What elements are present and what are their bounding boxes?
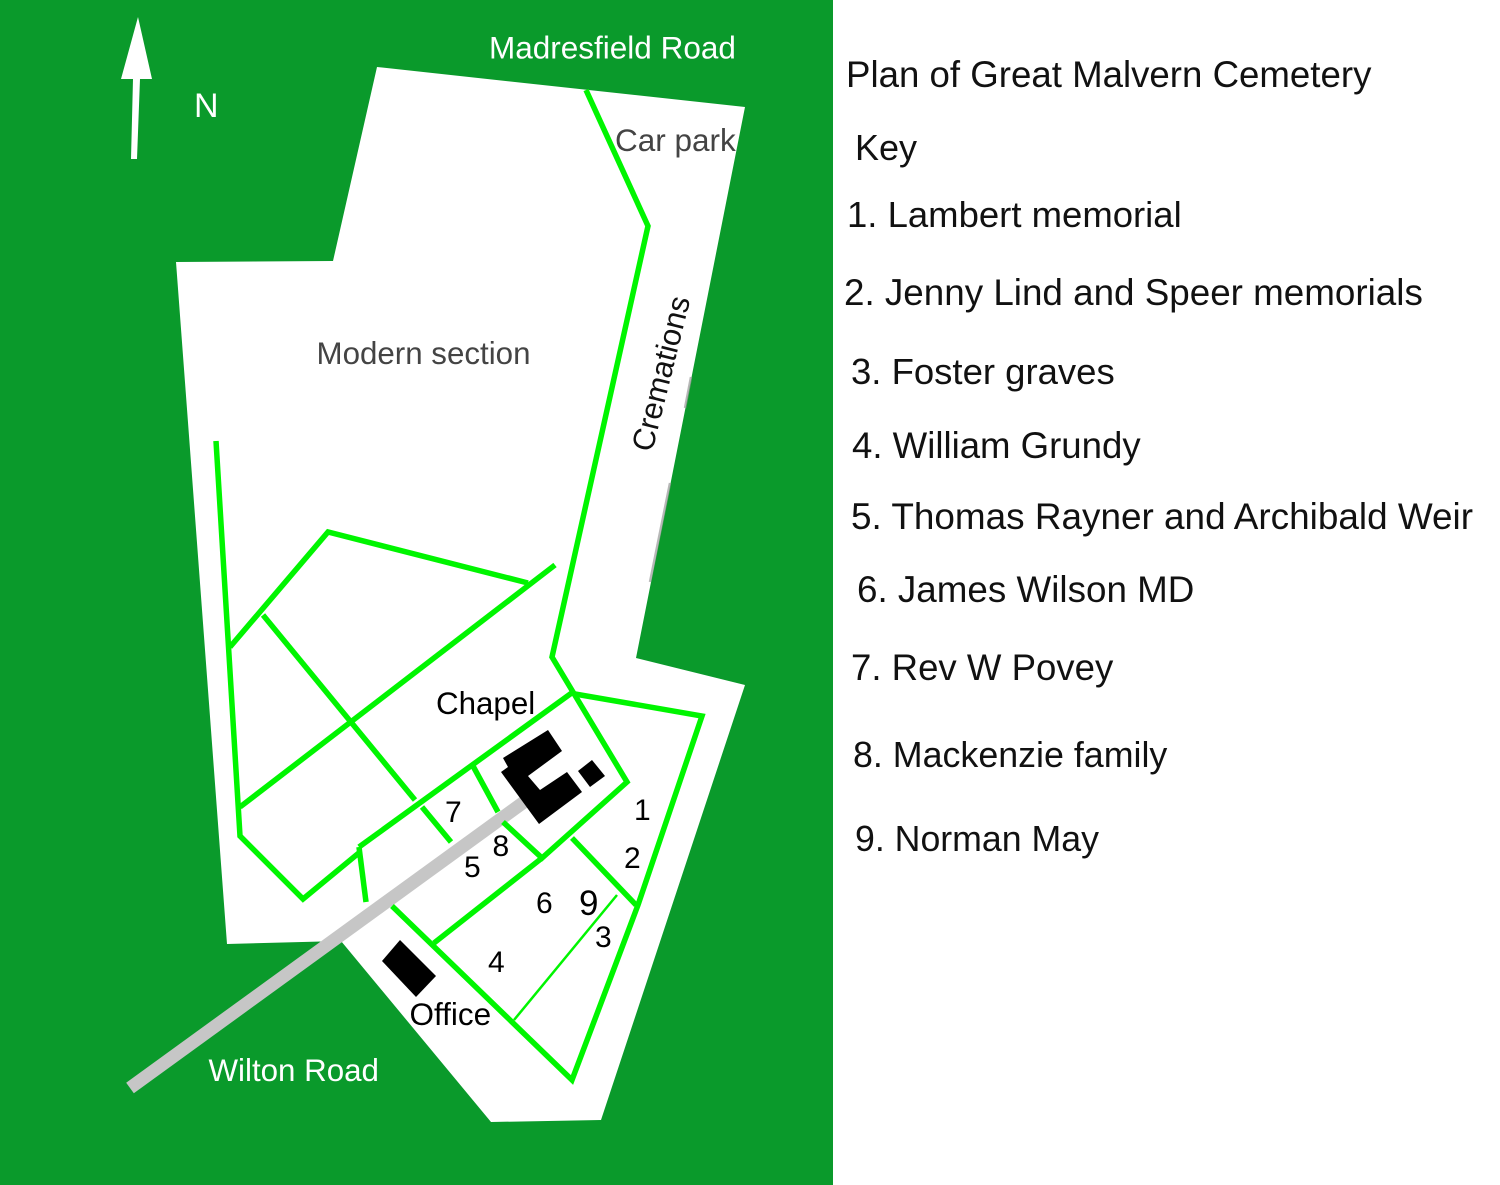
Wilton Road drive xyxy=(130,802,524,1088)
map numbers: 7 xyxy=(445,796,462,829)
key list: 9. Norman May xyxy=(855,819,1099,859)
key list: Key xyxy=(855,127,917,168)
map numbers: 5 xyxy=(464,851,481,884)
map numbers xyxy=(445,794,651,979)
area label: Cremations: Cremations xyxy=(625,292,697,455)
title: Plan of Great Malvern Cemetery xyxy=(846,54,1372,95)
grey edge texture along boundary xyxy=(650,377,691,582)
key list: 8. Mackenzie family xyxy=(853,735,1167,775)
area label: Car park: Car park xyxy=(615,122,736,158)
key list: 3. Foster graves xyxy=(851,351,1115,392)
panel: cemetery grounds xyxy=(176,67,745,1122)
key list: 1. Lambert memorial xyxy=(847,194,1182,235)
key list: 7. Rev W Povey xyxy=(851,647,1114,688)
panel: green map background xyxy=(0,0,833,1185)
map numbers: 1 xyxy=(634,794,651,827)
north label: N xyxy=(194,87,219,125)
key list xyxy=(844,127,1473,859)
building label: Office: Office xyxy=(410,996,491,1032)
road label: Wilton Road: Wilton Road xyxy=(208,1053,379,1088)
key list: 5. Thomas Rayner and Archibald Weir xyxy=(851,496,1473,537)
map numbers: 4 xyxy=(488,946,505,979)
map numbers: 9 xyxy=(579,884,598,923)
icon: north arrow xyxy=(121,17,152,159)
key list: 4. William Grundy xyxy=(852,425,1141,466)
key list: 6. James Wilson MD xyxy=(857,569,1194,610)
map numbers: 8 xyxy=(492,830,509,863)
map numbers: 3 xyxy=(595,921,612,954)
icon: office building xyxy=(382,940,436,997)
icon: chapel building xyxy=(501,730,582,824)
icon: chapel annex xyxy=(578,760,605,787)
map numbers: 6 xyxy=(536,887,553,920)
building label: Chapel: Chapel xyxy=(436,686,535,721)
key list: 2. Jenny Lind and Speer memorials xyxy=(844,272,1423,313)
map numbers: 2 xyxy=(624,842,641,875)
road label: Madresfield Road: Madresfield Road xyxy=(489,30,736,66)
paths network xyxy=(216,90,702,1080)
area label: Modern section: Modern section xyxy=(316,336,530,371)
